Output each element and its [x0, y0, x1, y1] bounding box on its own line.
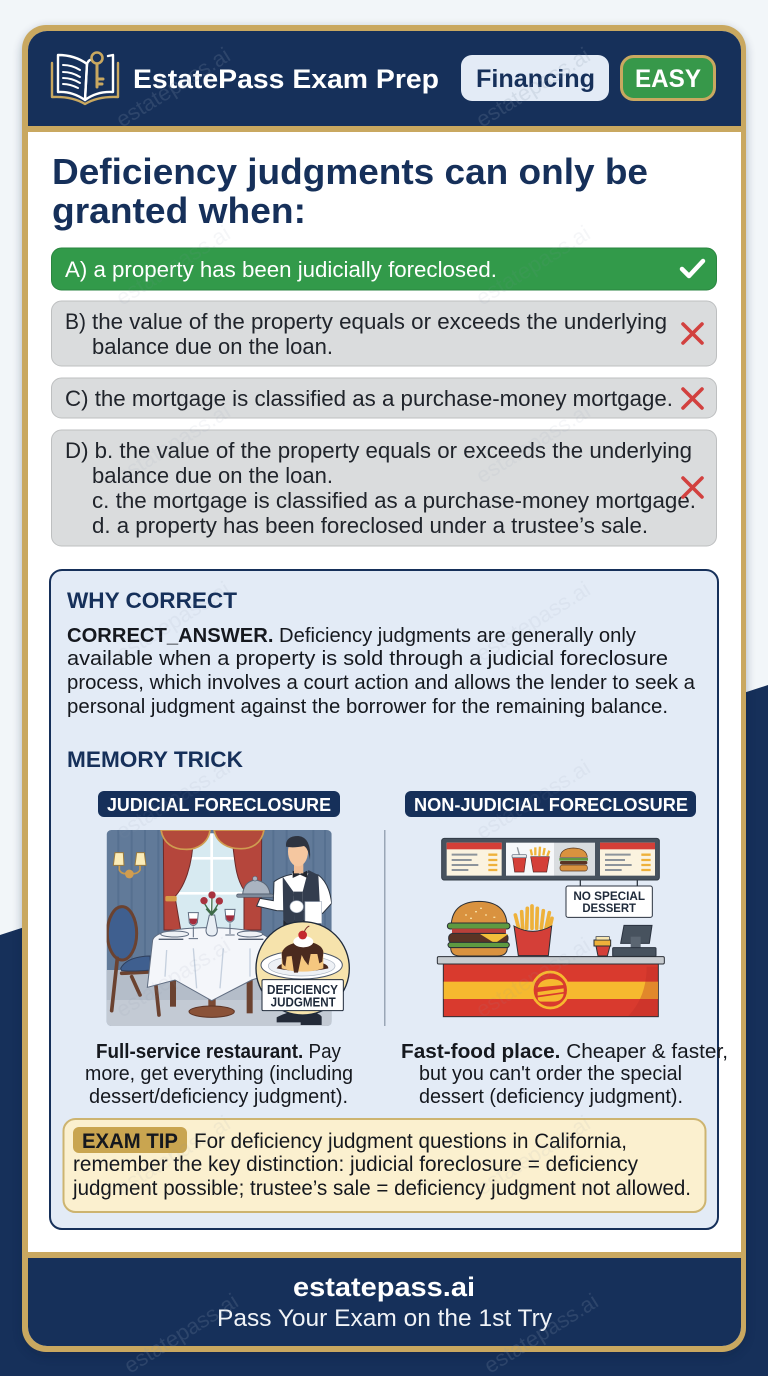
watermarks on light areas: estatepass.ai — [471, 398, 595, 488]
icon: cross — [683, 478, 702, 497]
option C — [52, 378, 716, 418]
watermarks on light areas: estatepass.ai — [471, 1110, 595, 1200]
watermarks on light areas: estatepass.ai — [111, 398, 235, 488]
option D: d. a property has been foreclosed under a trustee’s sale. — [92, 513, 648, 538]
watermarks on light areas: estatepass.ai — [111, 1110, 235, 1200]
watermarks on navy areas: estatepass.ai — [471, 42, 595, 132]
explanation text: personal judgment against the borrower for the remaining balance. — [67, 695, 668, 718]
option B: the value of the property equals or exceeds the underlying — [92, 309, 667, 334]
watermarks on navy areas: estatepass.ai — [479, 1288, 603, 1376]
fries — [515, 906, 552, 928]
watermarks on light areas: estatepass.ai — [471, 220, 595, 310]
option B: balance due on the loan. — [92, 334, 333, 359]
explanation text: CORRECT_ANSWER. Deficiency judgments are generally only — [67, 624, 637, 647]
watermarks on light areas: estatepass.ai — [111, 932, 235, 1022]
explanation text — [67, 624, 696, 718]
badge: non-judicial foreclosure: NON-JUDICIAL FORECLOSURE — [414, 795, 688, 815]
watermarks on light areas: estatepass.ai — [111, 220, 235, 310]
watermarks on navy areas: estatepass.ai — [119, 1288, 243, 1376]
illustration: full-service restaurant — [107, 830, 349, 1026]
watermarks on light areas: estatepass.ai — [111, 576, 235, 666]
option C: C) the mortgage is classified as a purchase-money mortgage. — [65, 386, 673, 411]
icon: open book with key — [52, 52, 118, 104]
option B: B) — [65, 309, 86, 334]
callout: exam tip: For deficiency judgment questions in California, — [194, 1130, 627, 1153]
watermarks on light areas: estatepass.ai — [471, 754, 595, 844]
explanation text: process, which involves a court action and allows the lender to seek a — [67, 671, 696, 694]
caption: fast food: Fast-food place. Cheaper & faster, — [401, 1041, 728, 1063]
header — [52, 52, 714, 104]
illustration: fast-food counter: DESSERT — [582, 901, 637, 915]
illustration: fast-food counter — [437, 838, 664, 1017]
menu board — [442, 838, 659, 880]
difficulty pill: EASY — [635, 65, 701, 93]
difficulty pill — [622, 56, 714, 100]
caption: restaurant: Full-service restaurant. Pay — [96, 1041, 341, 1063]
burger — [451, 901, 507, 923]
question title: Deficiency judgments can only be — [52, 151, 648, 192]
caption: fast food: dessert (deficiency judgment). — [419, 1086, 683, 1108]
caption: restaurant — [85, 1041, 353, 1108]
heading: memory trick: MEMORY TRICK — [67, 747, 243, 772]
illustration: full-service restaurant: JUDGMENT — [271, 996, 336, 1010]
sign — [580, 880, 637, 886]
option D: balance due on the loan. — [92, 463, 333, 488]
watermarks on light areas: estatepass.ai — [471, 932, 595, 1022]
caption: restaurant: dessert/deficiency judgment). — [89, 1086, 348, 1108]
category pill — [461, 55, 609, 101]
panel: explanation — [50, 570, 728, 1229]
category pill: Financing — [476, 65, 595, 93]
option A correct — [52, 248, 716, 290]
watermarks on light areas: estatepass.ai — [471, 576, 595, 666]
question title: granted when: — [52, 190, 306, 231]
callout: exam tip: judgment possible; trustee’s sale = deficiency judgment not allowed. — [72, 1177, 691, 1200]
heading: why correct: WHY CORRECT — [67, 588, 238, 613]
illustration: full-service restaurant: DEFICIENCY — [267, 983, 339, 997]
callout: exam tip — [64, 1119, 706, 1212]
icon: cross — [683, 324, 702, 343]
callout: exam tip: remember the key distinction: judicial foreclosure = deficiency — [73, 1153, 638, 1176]
footer text — [217, 1272, 552, 1332]
register — [621, 925, 652, 943]
footer text: estatepass.ai — [293, 1272, 475, 1302]
exam tip label: EXAM TIP — [82, 1130, 178, 1153]
badge: judicial foreclosure: JUDICIAL FORECLOSURE — [107, 795, 331, 815]
counter — [443, 964, 658, 1017]
waiter — [283, 920, 321, 926]
caption: fast food: but you can't order the special — [419, 1063, 682, 1085]
option D: c. the mortgage is classified as a purchase-money mortgage. — [92, 488, 696, 513]
divider — [384, 830, 386, 1026]
glasses and vase — [188, 913, 198, 925]
option B — [52, 301, 716, 366]
watermarks on navy areas: estatepass.ai — [111, 42, 235, 132]
icon: cross — [683, 389, 702, 408]
caption: restaurant: more, get everything (including — [85, 1063, 353, 1085]
explanation text: available when a property is sold through a judicial foreclosure — [67, 647, 668, 670]
option A correct: A) a property has been judicially foreclosed. — [65, 257, 497, 282]
table — [208, 999, 216, 1006]
small drink — [596, 946, 610, 956]
caption: fast food — [401, 1041, 728, 1108]
watermarks on light areas: estatepass.ai — [111, 754, 235, 844]
inset dessert — [256, 922, 349, 1015]
question title — [52, 151, 648, 231]
illustration: fast-food counter: NO SPECIAL — [573, 889, 645, 903]
watermarks on navy areas — [111, 42, 603, 1376]
watermarks on light areas — [111, 220, 595, 1200]
footer text: Pass Your Exam on the 1st Try — [217, 1305, 552, 1332]
brand name: EstatePass Exam Prep — [133, 64, 439, 94]
icon: check — [682, 261, 703, 276]
option D: D) b. the value of the property equals or exceeds the underlying — [65, 438, 692, 463]
option D — [52, 430, 716, 546]
chair — [107, 907, 137, 960]
